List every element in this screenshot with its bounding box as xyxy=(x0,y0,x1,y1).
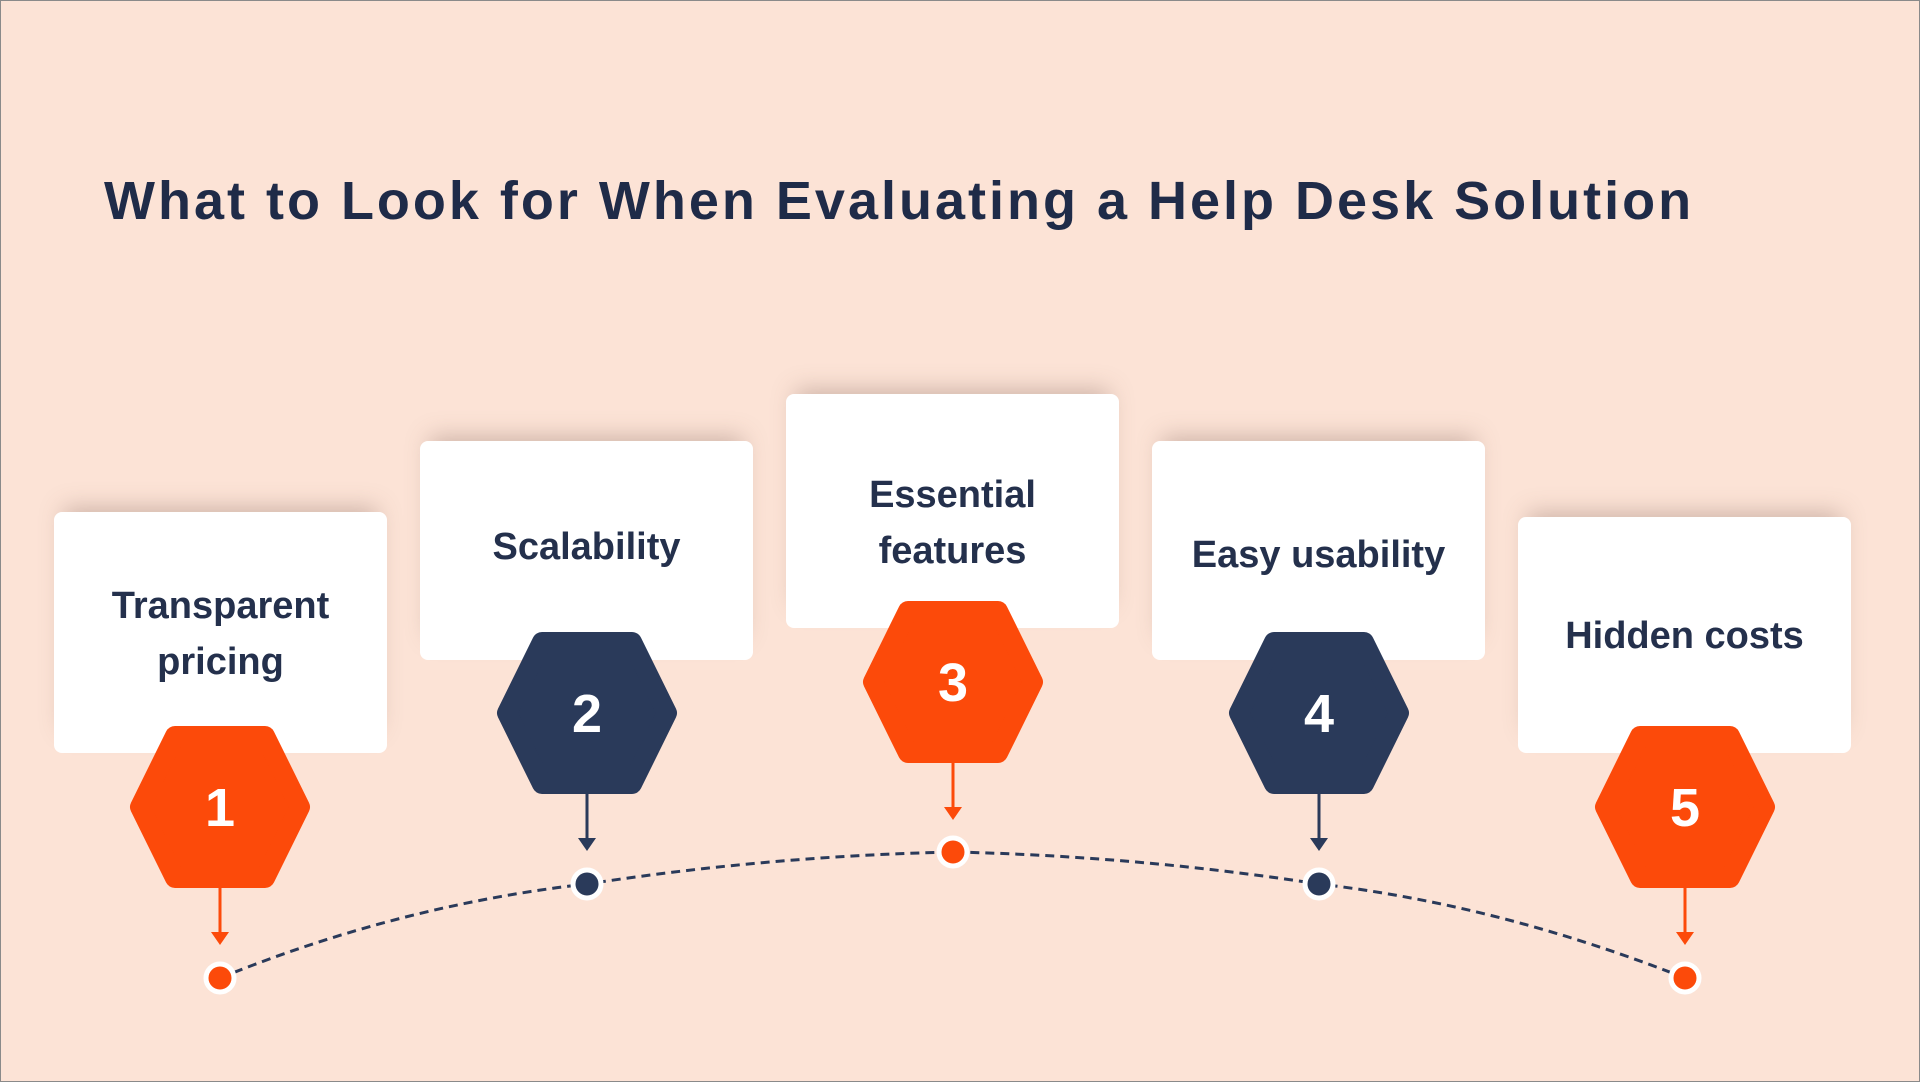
title: What to Look for When Evaluating a Help Desk Solution xyxy=(104,171,1694,231)
step 3 marker xyxy=(873,611,1033,866)
card 4: Easy usability xyxy=(1152,441,1485,660)
step 2 marker xyxy=(507,642,667,898)
card 5: Hidden costs xyxy=(1518,517,1851,753)
card 1: Transparent pricing: pricing xyxy=(157,641,284,683)
step 5 marker: 5 xyxy=(1670,778,1700,838)
card 4: Easy usability: Easy usability xyxy=(1192,534,1445,576)
card 3: Essential features xyxy=(786,394,1119,628)
step 1 marker: 1 xyxy=(205,778,235,838)
card 3: Essential features: features xyxy=(879,530,1026,572)
step 4 marker xyxy=(1239,642,1399,898)
step 1 marker xyxy=(140,736,300,992)
card 5: Hidden costs: Hidden costs xyxy=(1565,615,1804,657)
card 3: Essential features: Essential xyxy=(869,474,1036,516)
dashed timeline curve xyxy=(220,852,1685,978)
card 2: Scalability: Scalability xyxy=(492,526,680,568)
step 4 marker: 4 xyxy=(1304,684,1334,744)
card 2: Scalability xyxy=(420,441,753,660)
step 3 marker: 3 xyxy=(938,653,968,713)
card 1: Transparent pricing: Transparent xyxy=(112,585,329,627)
step 5 marker xyxy=(1605,736,1765,992)
card 1: Transparent pricing xyxy=(54,512,387,753)
step 2 marker: 2 xyxy=(572,684,602,744)
